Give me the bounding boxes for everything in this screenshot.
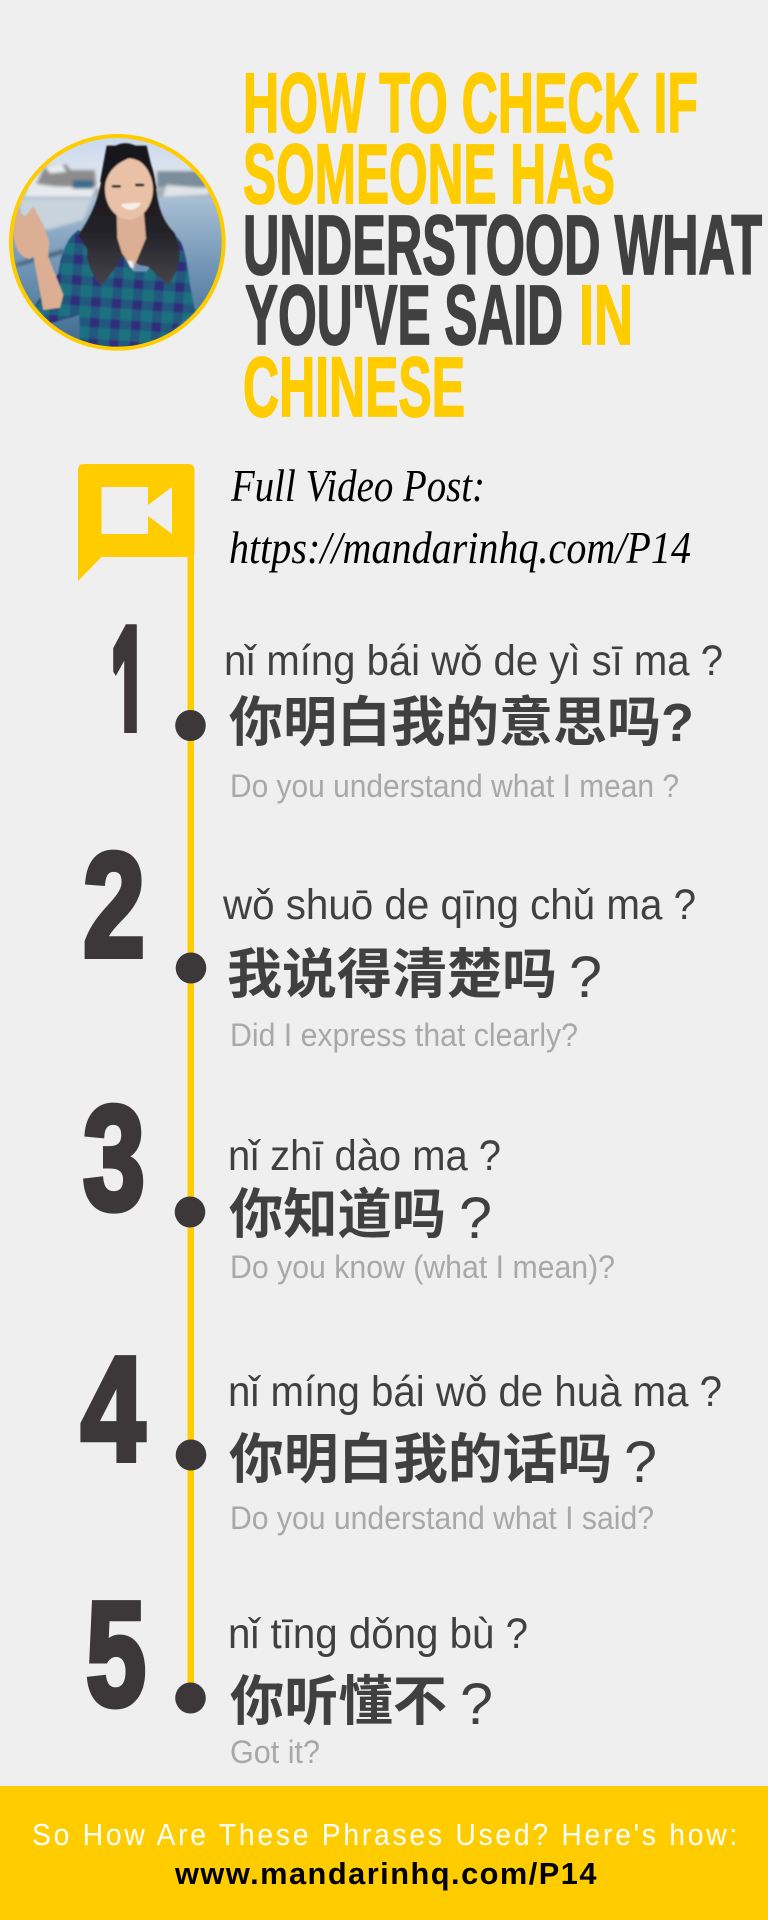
chinese 3: 你知道吗 [229,1185,446,1245]
pinyin 2: wǒ shuō de qīng chǔ ma ? [222,881,696,929]
phrase 3 [83,1076,615,1285]
pinyin 4: nǐ míng bái wǒ de huà ma ? [228,1368,722,1416]
video post link: https://mandarinhq.com/P14 [229,522,691,573]
footer link: www.mandarinhq.com/P14 [174,1856,598,1891]
phrase 2 [83,823,696,1053]
timeline dot 1 [175,710,206,741]
face [105,158,153,220]
question mark 4: ? [624,1430,657,1495]
title [243,56,762,434]
question mark 3: ? [459,1186,492,1251]
video post link: Full Video Post: [230,460,485,511]
phrase 4 [81,1327,722,1536]
icon: video camera speech bubble [78,464,194,581]
photo: woman waving in yellow ring [9,134,226,351]
english 1: Do you understand what I mean ? [230,768,679,804]
chinese 5: 你听懂不 [230,1672,447,1732]
pinyin 1: nǐ míng bái wǒ de yì sī ma ? [224,637,723,685]
timeline dot 5 [175,1682,206,1714]
question mark 2: ? [569,945,602,1010]
number 3: 3 [83,1076,145,1241]
title: CHINESE [243,340,465,434]
number 2: 2 [83,823,145,988]
shirt [35,230,195,358]
pinyin 5: nǐ tīng dǒng bù ? [228,1610,528,1658]
english 4: Do you understand what I said? [230,1500,654,1536]
english 2: Did I express that clearly? [230,1017,578,1053]
phrase 5 [86,1572,528,1770]
chinese 1: 你明白我的意思吗? [229,693,694,753]
video post link [229,460,691,573]
title: YOU'VE SAID [245,268,563,362]
timeline line [188,550,194,1698]
phrase 1 [113,624,722,804]
english 3: Do you know (what I mean)? [230,1249,615,1285]
chinese 4: 你明白我的话吗 [229,1430,612,1490]
english 5: Got it? [230,1734,320,1770]
phrase 1: 1 [110,587,147,803]
pinyin 3: nǐ zhī dào ma ? [228,1132,501,1180]
timeline dot 2 [176,952,206,984]
chinese 2: 我说得清楚吗 [227,945,557,1005]
question mark 5: ? [460,1672,493,1737]
timeline dot 4 [176,1440,206,1470]
neck [117,213,146,269]
title: IN [579,268,633,362]
number 4: 4 [81,1327,145,1492]
timeline dot 3 [175,1196,205,1228]
hair [78,143,180,286]
number 5: 5 [86,1572,146,1737]
footer band [0,1786,768,1920]
arm and hand [13,207,63,310]
